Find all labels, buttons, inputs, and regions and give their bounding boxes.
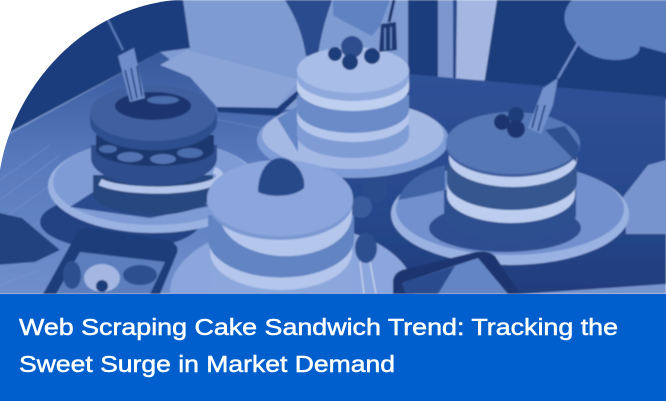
title text: Sweet Surge in Market Demand [19,351,395,377]
tablet dark edge [217,90,300,116]
fork 1 [107,18,145,102]
dark table on the right [342,74,666,294]
berries on cake 3 [494,107,525,138]
title text: Web Scraping Cake Sandwich Trend: Tracking the [19,314,618,340]
dark back-left area [0,0,190,140]
plate 2 [257,101,449,178]
fork 2 [379,0,397,52]
plate 1 [47,148,248,234]
plate 4 [170,232,414,294]
arm top center [333,0,390,36]
sheet on the table [160,50,300,107]
cake 2 [297,47,409,158]
strawberry on cake 4 [258,158,304,196]
dark clothing on the right [484,0,666,100]
cake 4 [207,160,354,300]
phone left [43,228,178,294]
cake 3 [444,112,580,224]
plate shadow left [40,204,198,244]
wood grain [2,119,261,191]
wood table left [0,52,300,294]
light wood strip bottom right [520,284,666,294]
cake 1 chocolate [90,85,220,215]
hand top left [285,0,332,56]
spoon [355,233,377,294]
light wood corner on the right [623,159,666,234]
shadow bottom left [0,212,60,265]
title band [0,294,666,401]
fork 3 [528,43,578,134]
photo: duotone cakes on a table [0,0,666,294]
hand right [564,0,666,60]
plate 3 [391,163,629,265]
title text [19,314,618,377]
window strips [408,0,497,80]
berries on cake 2 [328,36,380,70]
berries on the table [352,196,372,218]
back wall [9,0,486,136]
phone right [393,252,520,294]
